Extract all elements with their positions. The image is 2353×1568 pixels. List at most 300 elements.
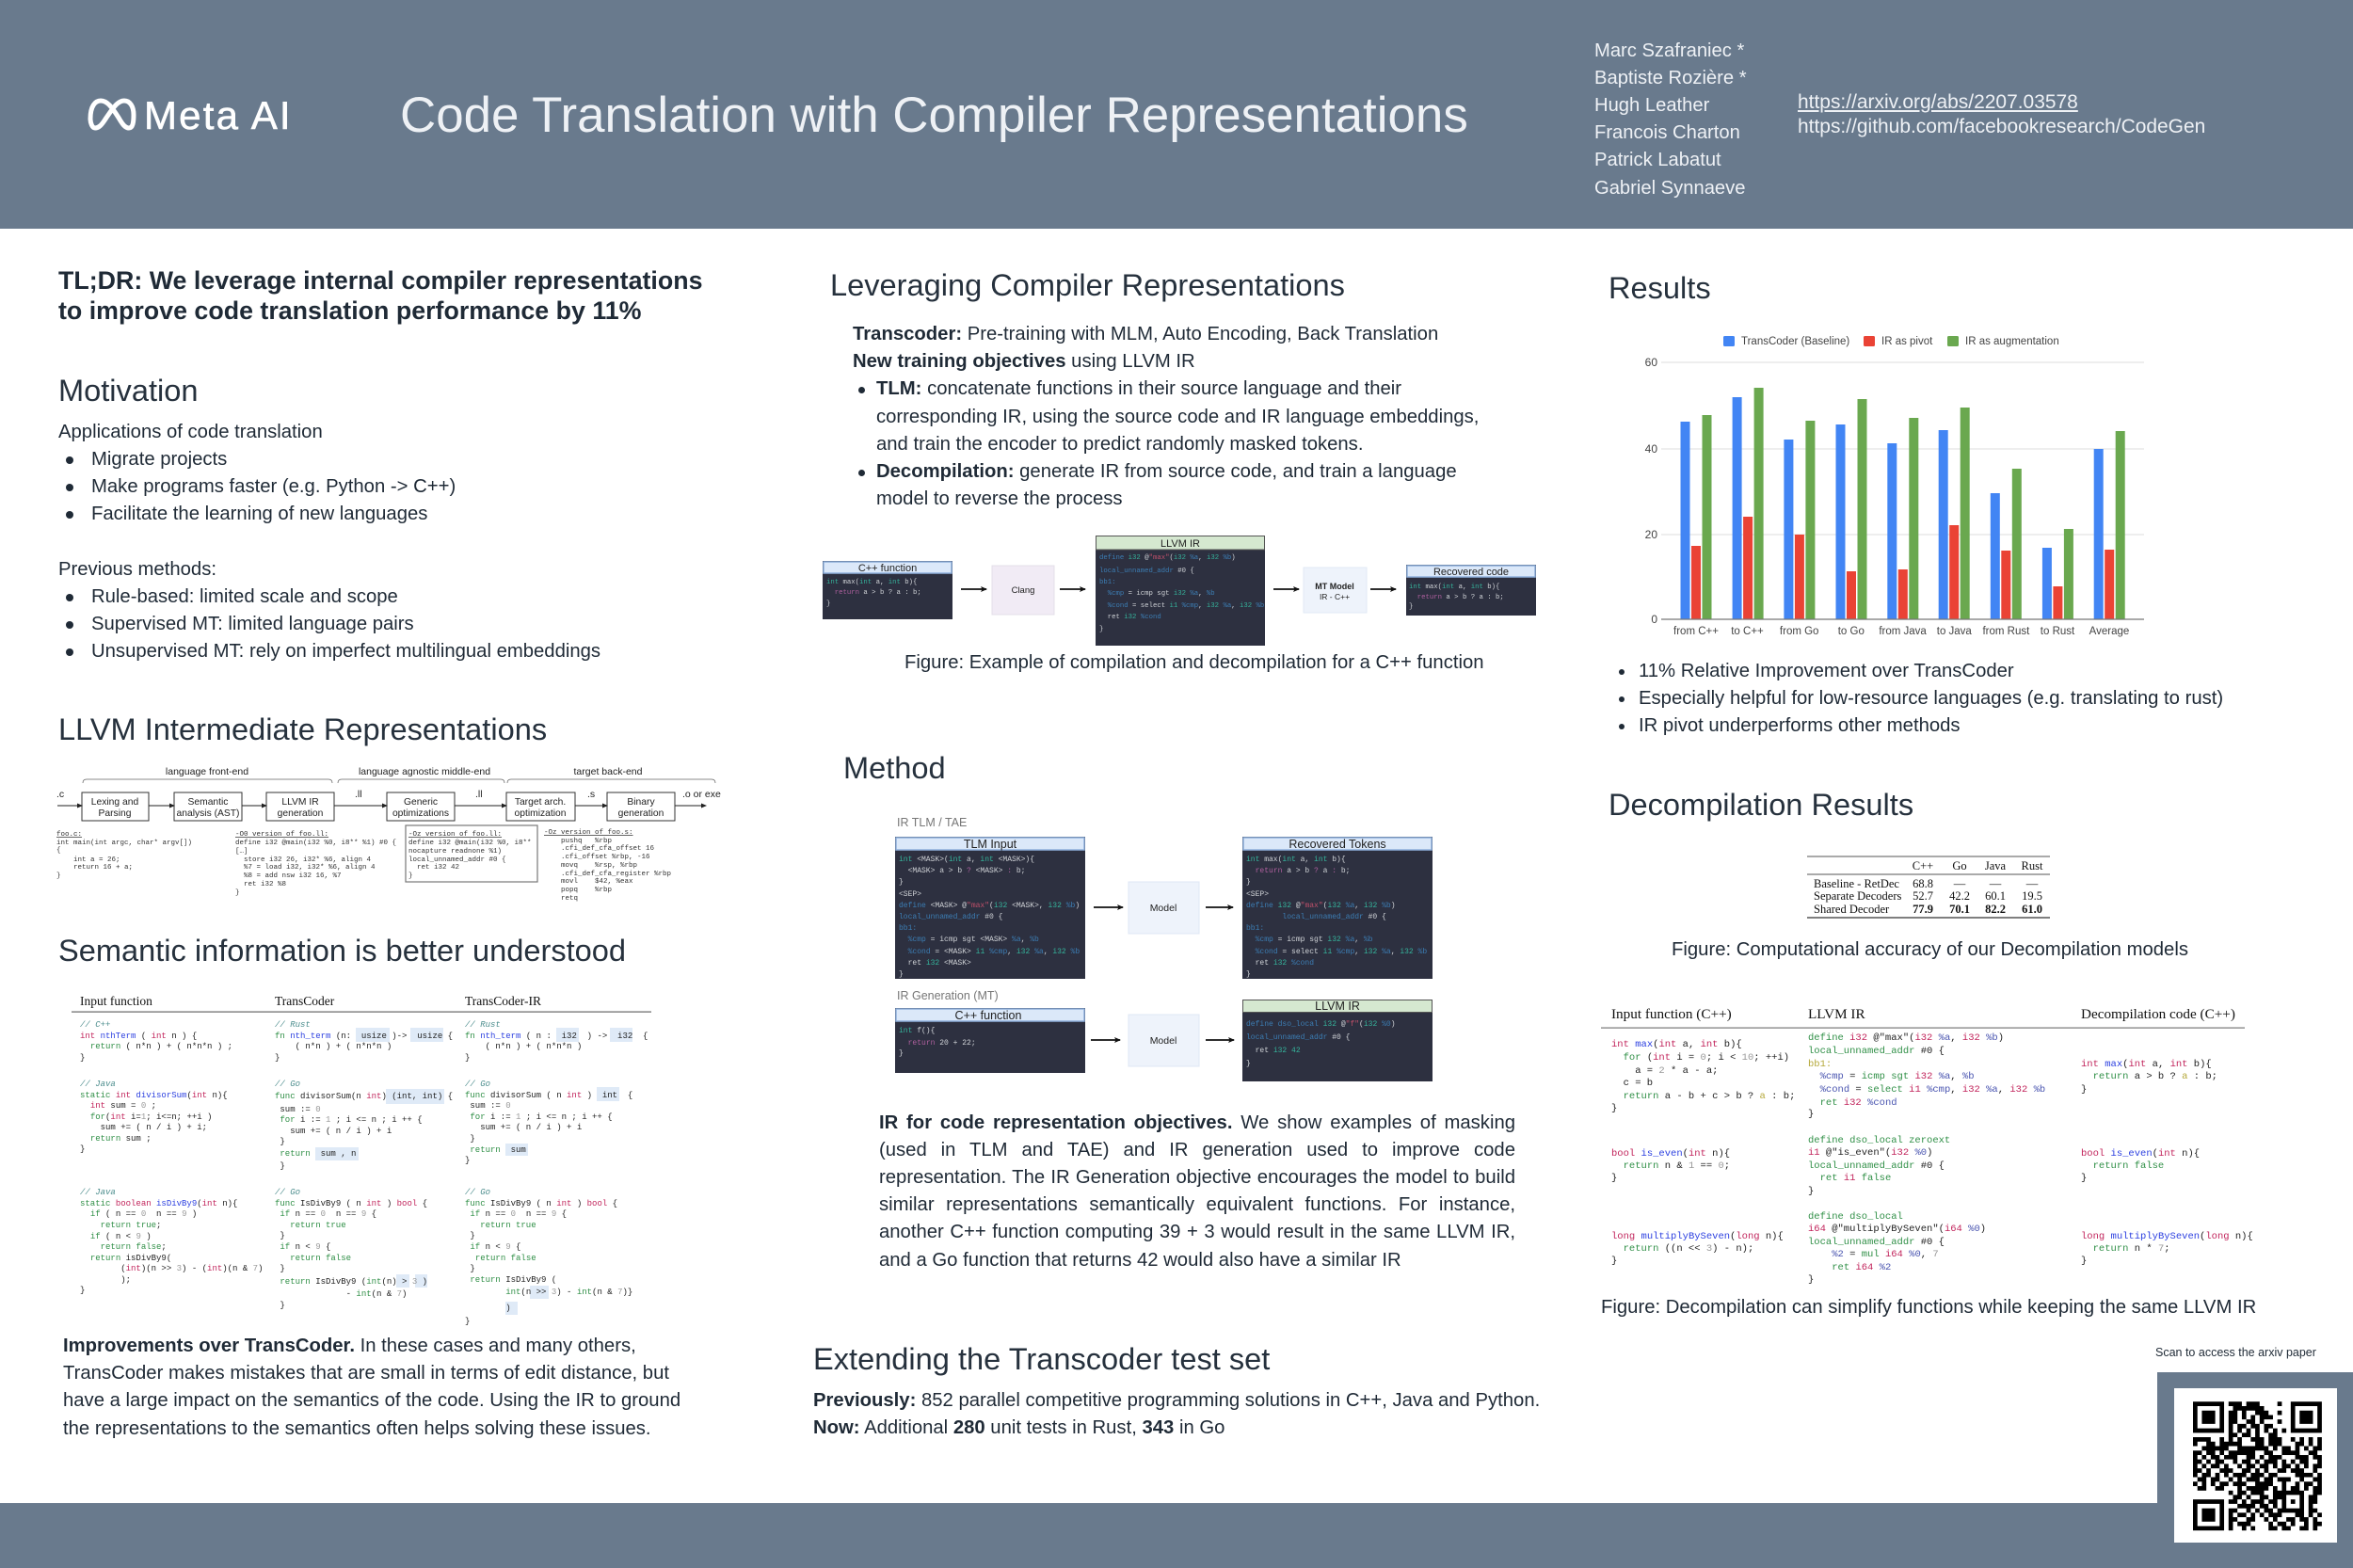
figure: translation examples table: // Go xyxy=(465,1080,490,1089)
table: decompilation accuracy: 42.2 xyxy=(1949,889,1970,903)
card: LLVM IR: bb1: xyxy=(1099,579,1116,586)
authors: Gabriel Synnaeve xyxy=(1594,178,1745,199)
table: decompilation accuracy: Separate Decoders xyxy=(1814,889,1901,903)
card: Recovered Tokens: bb1: xyxy=(1246,924,1264,933)
card: C++ function: C++ function xyxy=(858,563,917,574)
bar chart: translation results: from Go xyxy=(1780,626,1818,637)
figure: decompilation examples table: bool is_even(int n){ xyxy=(1611,1148,1730,1160)
card: C++ function: } xyxy=(826,600,830,608)
diagram: LLVM pipeline: int a = 26; xyxy=(56,856,120,864)
figure: translation examples table: } xyxy=(465,1156,470,1165)
diagram: LLVM pipeline: } xyxy=(408,872,413,880)
diagram: LLVM pipeline: optimization xyxy=(515,808,567,819)
diagram: LLVM pipeline: .ll xyxy=(355,789,362,800)
figure: translation examples table: ) xyxy=(465,1304,511,1313)
diagram: LLVM pipeline: .cfi_def_cfa_offset 16 xyxy=(544,845,655,853)
figure: decompilation examples table: %cmp = icmp sgt i32 %a, %b xyxy=(1808,1071,1975,1082)
figure: translation examples table: // Go xyxy=(275,1188,300,1197)
card: LLVM IR output xyxy=(1242,1000,1433,1081)
box: Clang: Clang xyxy=(1012,585,1034,596)
figure: decompilation examples table: return false xyxy=(2081,1160,2164,1172)
bar chart: translation results: 40 xyxy=(1645,442,1657,456)
figure: decompilation examples table: %cond = select i1 %cmp, i32 %a, i32 %b xyxy=(1808,1084,2045,1096)
figure: decompilation examples table: return a - b + c > b ? a : b; xyxy=(1611,1091,1795,1102)
TLDR: to improve code translation performance by 11% xyxy=(58,296,641,325)
header band xyxy=(0,0,2353,229)
caption: compilation figure: Figure: Example of compilation and decompilation for a C++ function xyxy=(904,651,1484,672)
figure: translation examples table: func divisorSum(n int) (int, int) { xyxy=(275,1092,453,1101)
card: LLVM IR: LLVM IR xyxy=(1160,538,1200,550)
caption: decompilation figure: Figure: Decompilation can simplify functions while keeping the same LLVM IR xyxy=(1601,1297,2256,1318)
figure: translation examples table: // Go xyxy=(465,1188,490,1197)
table: decompilation accuracy: 77.9 xyxy=(1913,903,1933,916)
figure: decompilation examples table: Decompilation code (C++) xyxy=(2081,1006,2235,1022)
card: Recovered Tokens: %cmp = icmp sgt i32 %a, %b xyxy=(1246,936,1373,944)
box: Model: Model xyxy=(1150,903,1176,914)
table: decompilation accuracy: 70.1 xyxy=(1949,903,1970,916)
method paragraph: similar representations semantically equivalent functions. For instance, xyxy=(879,1194,1515,1215)
figure: translation examples table: sum += ( n / i ) + i xyxy=(275,1127,392,1136)
card: Recovered Tokens: Recovered Tokens xyxy=(1289,838,1386,851)
bar chart: translation results: 20 xyxy=(1645,528,1657,541)
table: decompilation accuracy: 52.7 xyxy=(1913,889,1933,903)
figure: translation examples table: // Go xyxy=(275,1080,300,1089)
diagram: LLVM pipeline: %8 = add nsw i32 16, %7 xyxy=(235,872,342,880)
figure: translation examples table: ( n*n ) + ( n*n*n ) xyxy=(275,1042,392,1051)
diagram: LLVM pipeline: -O0 version of foo.ll: xyxy=(235,831,328,839)
leveraging text: and train the encoder to predict randomly masked tokens. xyxy=(876,434,1363,455)
figure: decompilation examples table: ret i32 %cond xyxy=(1808,1097,1897,1109)
QR code xyxy=(2174,1388,2337,1543)
card: LLVM IR output: LLVM IR xyxy=(1315,1000,1360,1013)
results bullets xyxy=(1619,661,2223,736)
leveraging text: Transcoder: Pre-training with MLM, Auto Encoding, Back Translation xyxy=(853,324,1438,344)
diagram: LLVM pipeline: Lexing and xyxy=(91,797,138,808)
bar chart: translation results: from C++ xyxy=(1673,626,1719,637)
diagram: LLVM pipeline: local_unnamed_addr #0 { xyxy=(408,856,506,864)
figure: decompilation examples table: Input function (C++) xyxy=(1611,1006,1732,1022)
diagram: LLVM pipeline: LLVM IR xyxy=(281,797,319,808)
results bullets: IR pivot underperforms other methods xyxy=(1639,715,1961,736)
figure: translation examples table: func divisorSum ( n int ) int { xyxy=(465,1091,632,1100)
card: Recovered Tokens: } xyxy=(1246,970,1251,979)
card: LLVM IR: } xyxy=(1099,626,1103,633)
authors: Patrick Labatut xyxy=(1594,150,1721,170)
figure: decompilation examples table: define i32 @"max"(i32 %a, i32 %b) xyxy=(1808,1032,2004,1044)
diagram: LLVM pipeline: generation xyxy=(278,808,324,819)
table: decompilation accuracy: Go xyxy=(1952,859,1967,872)
TLDR xyxy=(58,266,702,325)
figure: translation examples table: return sum ; xyxy=(80,1134,152,1144)
figure: translation examples table: sum := 0 xyxy=(275,1105,321,1114)
figure: decompilation examples table: return n & 1 == 0; xyxy=(1611,1160,1730,1172)
legend: TransCoder (Baseline) xyxy=(1741,336,1849,347)
card: LLVM IR: %cmp = icmp sgt i32 %a, %b xyxy=(1099,590,1215,598)
box: Model second: Model xyxy=(1150,1035,1176,1047)
leveraging text: TLM: concatenate functions in their source language and their xyxy=(876,378,1401,399)
figure: translation examples table: if ( n == 0 n == 9 ) xyxy=(80,1209,197,1219)
diagram: LLVM pipeline: Semantic xyxy=(188,797,228,808)
figure: translation examples table: for(int i=1; i<=n; ++i ) xyxy=(80,1112,212,1122)
figure: decompilation examples table: } xyxy=(1808,1109,1814,1120)
figure: translation examples table: if ( n < 9 ) xyxy=(80,1232,152,1241)
card: Recovered Tokens: local_unnamed_addr #0 { xyxy=(1246,913,1386,921)
figure: translation examples table: TransCoder-IR xyxy=(465,994,541,1008)
diagram: LLVM pipeline: store i32 26, i32* %6, align 4 xyxy=(235,856,372,864)
QR caption: Scan to access the arxiv paper xyxy=(2155,1346,2316,1359)
figure: decompilation examples table: local_unnamed_addr #0 { xyxy=(1808,1160,1945,1172)
figure: decompilation examples table: ret i1 false xyxy=(1808,1173,1891,1184)
table: decompilation accuracy: 82.2 xyxy=(1985,903,2006,916)
table: decompilation accuracy: Java xyxy=(1985,859,2007,872)
diagram: LLVM pipeline: Parsing xyxy=(99,808,132,819)
title: Code Translation with Compiler Representations xyxy=(400,87,1468,143)
card: C++ function xyxy=(823,561,952,619)
figure: translation examples table: if n < 9 { xyxy=(275,1242,330,1252)
card: LLVM IR output: ret i32 42 xyxy=(1246,1047,1301,1055)
card: Recovered code: } xyxy=(1409,603,1413,611)
extending text: Previously: 852 parallel competitive programming solutions in C++, Java and Python. xyxy=(813,1389,1540,1410)
card: TLM Input: int <MASK>(int a, int <MASK>){ xyxy=(899,856,1034,864)
bar chart: translation results: to Go xyxy=(1838,626,1865,637)
card: C++ function input: C++ function xyxy=(955,1009,1021,1022)
bar chart: translation results xyxy=(1645,336,2144,637)
diagram: LLVM pipeline: int main(int argc, char* argv[]) xyxy=(56,840,192,847)
figure: translation examples table: if n < 9 { xyxy=(465,1242,520,1252)
figure: translation examples table: int nthTerm ( int n ) { xyxy=(80,1032,197,1041)
method paragraph: (used in TLM and TAE) and IR generation used to improve code xyxy=(879,1140,1515,1160)
diagram: LLVM pipeline: movl $42, %eax xyxy=(544,878,633,886)
figure: translation examples table: fn nth_term (n: usize )-> usize { xyxy=(275,1032,453,1041)
table: decompilation accuracy: 60.1 xyxy=(1985,889,2006,903)
diagram: LLVM pipeline: -Oz version of foo.ll: xyxy=(408,831,502,839)
links: https://github.com/facebookresearch/CodeGen xyxy=(1798,115,2205,137)
improvements text: have a large impact on the semantics of the code. Using the IR to ground xyxy=(63,1390,680,1411)
bar chart: translation results: to C++ xyxy=(1731,626,1764,637)
diagram: LLVM pipeline: .s xyxy=(587,789,595,800)
figure: translation examples table: } xyxy=(275,1053,280,1063)
figure: decompilation examples table: local_unnamed_addr #0 { xyxy=(1808,1046,1945,1057)
figure: translation examples table: if n == 0 n == 9 { xyxy=(275,1209,376,1219)
figure: decompilation examples table: } xyxy=(2081,1256,2087,1267)
figure: decompilation examples table: long multiplyBySeven(long n){ xyxy=(1611,1231,1784,1242)
diagram: IR objectives: IR TLM / TAE xyxy=(897,816,967,829)
improvements text: Improvements over TransCoder. In these cases and many others, xyxy=(63,1336,636,1356)
figure: decompilation examples table: i64 @"multiplyBySeven"(i64 %0) xyxy=(1808,1224,1986,1235)
footer band xyxy=(0,1503,2353,1568)
diagram: LLVM pipeline: define i32 @main(i32 %0, i8** xyxy=(408,840,532,847)
figure: decompilation examples table: } xyxy=(1611,1173,1617,1184)
bar chart: translation results: to Java xyxy=(1937,626,1972,637)
bar chart: translation results: from Rust xyxy=(1982,626,2030,637)
figure: decompilation examples table: c = b xyxy=(1611,1078,1653,1089)
diagram: LLVM pipeline: -Oz version of foo.s: xyxy=(544,829,633,837)
figure: translation examples table: } xyxy=(465,1053,470,1063)
figure: decompilation examples table: ret i64 %2 xyxy=(1808,1262,1891,1273)
leveraging text: New training objectives using LLVM IR xyxy=(853,351,1195,372)
figure: translation examples table: // Rust xyxy=(465,1020,501,1030)
figure: translation examples table: return true; xyxy=(80,1221,161,1230)
method paragraph xyxy=(879,1112,1515,1271)
figure: decompilation examples table: } xyxy=(2081,1084,2087,1096)
diagram: LLVM pipeline: language agnostic middle-end xyxy=(359,766,490,777)
figure: translation examples table: } xyxy=(465,1264,475,1273)
figure: translation examples table: } xyxy=(275,1301,285,1310)
box: Model xyxy=(1128,882,1199,934)
TLDR: TL;DR: We leverage internal compiler representations xyxy=(58,266,702,295)
figure: translation examples table: sum += ( n / i ) + i xyxy=(465,1123,582,1132)
card: TLM Input: %cmp = icmp sgt <MASK> %a, %b xyxy=(899,936,1039,944)
authors xyxy=(1594,40,1747,199)
figure: translation examples table: } xyxy=(465,1231,475,1240)
card: LLVM IR: local_unnamed_addr #0 { xyxy=(1099,568,1194,575)
figure: translation examples table: return false xyxy=(465,1254,536,1263)
figure: translation examples table: // Rust xyxy=(275,1020,311,1030)
diagram: LLVM pipeline: } xyxy=(56,872,61,880)
figure: translation examples table: } xyxy=(275,1231,285,1240)
figure: translation examples table: if n == 0 n == 9 { xyxy=(465,1209,567,1219)
figure: decompilation examples table: bb1: xyxy=(1808,1059,1832,1070)
leveraging text: model to reverse the process xyxy=(876,488,1123,509)
heading: Motivation: Motivation xyxy=(58,373,198,408)
card: LLVM IR: %cond = select i1 %cmp, i32 %a, i32 %b xyxy=(1099,602,1264,610)
table: decompilation accuracy: 19.5 xyxy=(2022,889,2042,903)
figure: translation examples table: } xyxy=(275,1264,285,1273)
card: Recovered code: return a > b ? a : b; xyxy=(1409,594,1504,601)
figure: decompilation examples table: long multiplyBySeven(long n){ xyxy=(2081,1231,2253,1242)
figure: decompilation examples table: int max(int a, int b){ xyxy=(1611,1039,1742,1050)
card: C++ function input: int f(){ xyxy=(899,1027,936,1035)
logo: Meta AI: Meta AI xyxy=(144,93,293,137)
diagram: LLVM pipeline: %7 = load i32, i32* %6, align 4 xyxy=(235,864,376,872)
diagram: LLVM pipeline: .cfi_offset %rbp, -16 xyxy=(544,854,650,861)
figure: decompilation examples table: i1 @"is_even"(i32 %0) xyxy=(1808,1147,1932,1159)
diagram: LLVM pipeline: optimizations xyxy=(392,808,449,819)
card: TLM Input: bb1: xyxy=(899,924,917,933)
figure: translation examples table: return ( n*n ) + ( n*n*n ) ; xyxy=(80,1042,232,1051)
box: Clang xyxy=(992,566,1054,615)
diagram: LLVM pipeline: ret i32 %8 xyxy=(235,881,286,888)
figure: translation examples table: Input function xyxy=(80,994,152,1008)
motivation text: Supervised MT: limited language pairs xyxy=(91,614,414,634)
figure: translation examples table: static boolean isDivBy9(int n){ xyxy=(80,1199,237,1208)
diagram: LLVM pipeline: […] xyxy=(235,848,248,856)
figure: decompilation examples table: a = 2 * a - a; xyxy=(1611,1065,1718,1077)
figure: translation examples table: } xyxy=(80,1144,85,1154)
table: decompilation accuracy: — xyxy=(1989,877,2002,890)
card: TLM Input: <MASK> a > b ? <MASK> : b; xyxy=(899,867,1025,875)
bar chart: translation results: 0 xyxy=(1651,613,1657,626)
figure: translation examples table: return true xyxy=(275,1221,346,1230)
authors: Baptiste Rozière * xyxy=(1594,68,1747,88)
card: Recovered Tokens: <SEP> xyxy=(1246,890,1269,899)
figure: translation examples table: func IsDivBy9 ( n int ) bool { xyxy=(275,1199,427,1208)
card: TLM Input: <SEP> xyxy=(899,890,921,899)
diagram: IR objectives: IR Generation (MT) xyxy=(897,989,999,1002)
method paragraph: and a Go function that returns 42 would also have a similar IR xyxy=(879,1250,1401,1271)
card: LLVM IR: ret i32 %cond xyxy=(1099,614,1161,621)
card: TLM Input: TLM Input xyxy=(964,838,1017,851)
bar chart: translation results: to Rust xyxy=(2041,626,2075,637)
diagram: LLVM pipeline: nocapture readnone %1) xyxy=(408,848,502,856)
motivation text: Rule-based: limited scale and scope xyxy=(91,586,398,607)
bar chart: translation results: from Java xyxy=(1879,626,1927,637)
figure: decompilation examples table: } xyxy=(2081,1173,2087,1184)
table: decompilation accuracy: — xyxy=(2025,877,2039,890)
diagram: LLVM pipeline: foo.c: xyxy=(56,831,82,839)
figure: decompilation examples table: for (int i = 0; i < 10; ++i) xyxy=(1611,1052,1789,1064)
caption: accuracy table: Figure: Computational accuracy of our Decompilation models xyxy=(1672,939,2188,960)
diagram: LLVM pipeline: { xyxy=(56,847,61,855)
legend: IR as augmentation xyxy=(1965,336,2059,347)
figure: translation examples table: return false; xyxy=(80,1242,167,1252)
card: Recovered Tokens: define i32 @"max"(i32 %a, i32 %b) xyxy=(1246,902,1396,910)
figure: translation examples table: return IsDivBy9 ( xyxy=(465,1275,556,1285)
heading: Method: Method xyxy=(843,750,946,785)
figure: translation examples table: ); xyxy=(80,1275,131,1285)
figure: decompilation examples table: define dso_local zeroext xyxy=(1808,1135,1950,1146)
box: Model second xyxy=(1128,1015,1199,1066)
figure: translation examples table: return false xyxy=(275,1254,351,1263)
figure: translation examples table: TransCoder xyxy=(275,994,335,1008)
figure: translation examples table: return sum xyxy=(465,1145,526,1155)
diagram: compilation and decompilation flow xyxy=(823,536,1536,646)
method paragraph: representation. The IR Generation objective encourages the model to build xyxy=(879,1167,1515,1188)
box: MT Model: MT Model xyxy=(1315,582,1354,591)
card: TLM Input xyxy=(895,837,1085,979)
figure: translation examples table: } xyxy=(275,1137,285,1146)
method paragraph: another C++ function computing 39 + 3 would result in the same LLVM IR, xyxy=(879,1222,1515,1242)
figure: translation examples table: } xyxy=(465,1317,470,1326)
improvements text xyxy=(63,1336,680,1439)
figure: translation examples table: // Java xyxy=(80,1080,116,1089)
diagram: LLVM pipeline: retq xyxy=(544,895,578,903)
figure: translation examples table: static int divisorSum(int n){ xyxy=(80,1091,228,1100)
leveraging text: Decompilation: generate IR from source code, and train a language xyxy=(876,461,1457,482)
figure: decompilation examples table: int max(int a, int b){ xyxy=(2081,1059,2212,1070)
table: decompilation accuracy: Baseline - RetDec xyxy=(1814,877,1899,890)
table: decompilation accuracy: Rust xyxy=(2022,859,2043,872)
motivation text: Unsupervised MT: rely on imperfect multilingual embeddings xyxy=(91,641,600,662)
card: TLM Input: define <MASK> @"max"(i32 <MASK>, i32 %b) xyxy=(899,902,1080,910)
table: decompilation accuracy: — xyxy=(1953,877,1966,890)
card: Recovered Tokens: ret i32 %cond xyxy=(1246,959,1314,968)
heading: Decompilation Results: Decompilation Results xyxy=(1609,787,1913,822)
table: decompilation accuracy: C++ xyxy=(1913,859,1933,872)
figure: translation examples table: for i := 1 ; i <= n ; i ++ { xyxy=(275,1115,423,1125)
table: decompilation accuracy: 68.8 xyxy=(1913,877,1933,890)
method paragraph: IR for code representation objectives. We show examples of masking xyxy=(879,1112,1515,1133)
diagram: LLVM pipeline: ret i32 42 xyxy=(408,864,459,872)
figure: translation examples table xyxy=(72,994,651,1326)
diagram: LLVM pipeline: movq %rsp, %rbp xyxy=(544,862,637,870)
diagram: LLVM pipeline: analysis (AST) xyxy=(177,808,239,819)
card: TLM Input: } xyxy=(899,878,904,887)
figure: translation examples table: return IsDivBy9 (int(n) > 3 ) xyxy=(275,1277,427,1287)
card: TLM Input: local_unnamed_addr #0 { xyxy=(899,913,1003,921)
figure: decompilation examples table: } xyxy=(1611,1256,1617,1267)
figure: decompilation examples table: return n * 7; xyxy=(2081,1243,2170,1255)
diagram: LLVM pipeline: popq %rbp xyxy=(544,887,612,894)
authors: Francois Charton xyxy=(1594,122,1740,143)
heading: Semantic: Semantic information is better understood xyxy=(58,933,626,968)
card: LLVM IR output: } xyxy=(1246,1060,1251,1068)
diagram: LLVM pipeline: Target arch. xyxy=(515,797,566,808)
card: LLVM IR: define i32 @"max"(i32 %a, i32 %b) xyxy=(1099,554,1236,562)
card: TLM Input: } xyxy=(899,970,904,979)
figure: decompilation examples table: } xyxy=(1808,1274,1814,1286)
motivation text: Previous methods: xyxy=(58,559,216,580)
diagram: LLVM pipeline: .ll xyxy=(475,789,483,800)
figure: decompilation examples table: return a > b ? a : b; xyxy=(2081,1071,2217,1082)
figure: translation examples table: int sum = 0 ; xyxy=(80,1101,156,1111)
leveraging text xyxy=(853,324,1479,509)
card: C++ function: int max(int a, int b){ xyxy=(826,579,917,586)
card: C++ function input: } xyxy=(899,1049,904,1058)
figure: translation examples table: sum := 0 xyxy=(465,1101,511,1111)
figure: translation examples table: sum += ( n / i ) + i; xyxy=(80,1123,207,1132)
card: Recovered code: Recovered code xyxy=(1433,567,1509,578)
highlights xyxy=(315,1028,632,1315)
diagram: LLVM pipeline: language front-end xyxy=(166,766,248,777)
diagram: LLVM pipeline: generation xyxy=(618,808,664,819)
figure: translation examples table: // C++ xyxy=(80,1020,110,1030)
heading: Results: Results xyxy=(1609,270,1711,305)
figure: translation examples table: int(n >> 3) - int(n & 7)} xyxy=(465,1288,632,1297)
motivation text xyxy=(58,422,600,662)
improvements text: TransCoder makes mistakes that are small in terms of edit distance, but xyxy=(63,1363,669,1384)
figure: translation examples table: } xyxy=(80,1053,85,1063)
heading: Leveraging: Leveraging Compiler Representations xyxy=(830,267,1345,302)
results bullets: 11% Relative Improvement over TransCoder xyxy=(1639,661,2014,681)
legend: IR as pivot xyxy=(1881,336,1933,347)
figure: translation examples table: } xyxy=(275,1161,285,1171)
figure: translation examples table: } xyxy=(80,1286,85,1295)
figure: decompilation examples table: LLVM IR xyxy=(1808,1006,1865,1022)
card: Recovered Tokens xyxy=(1242,837,1433,979)
figure: decompilation examples table: } xyxy=(1808,1186,1814,1197)
QR backing panel xyxy=(2157,1372,2353,1504)
figure: translation examples table: } xyxy=(465,1134,475,1144)
heading: LLVM: LLVM Intermediate Representations xyxy=(58,712,547,746)
card: Recovered Tokens: return a > b ? a : b; xyxy=(1246,867,1350,875)
bar chart: translation results: 60 xyxy=(1645,356,1657,369)
diagram: LLVM pipeline: pushq %rbp xyxy=(544,838,612,845)
figure: decompilation examples table: %2 = mul i64 %0, 7 xyxy=(1808,1249,1939,1260)
card: LLVM IR output: local_unnamed_addr #0 { xyxy=(1246,1033,1351,1042)
figure: translation examples table: return true xyxy=(465,1221,536,1230)
improvements text: the representations to the semantics often helps solving these issues. xyxy=(63,1418,651,1439)
figure: translation examples table: (int)(n >> 3) - (int)(n & 7) xyxy=(80,1264,263,1273)
bar chart: translation results: Average xyxy=(2089,626,2129,637)
card: Recovered code xyxy=(1406,565,1536,616)
diagram: LLVM pipeline: target back-end xyxy=(574,766,643,777)
results bullets: Especially helpful for low-resource languages (e.g. translating to rust) xyxy=(1639,688,2223,709)
card: TLM Input: %cond = <MASK> i1 %cmp, i32 %a, i32 %b xyxy=(899,948,1080,956)
card: Recovered Tokens: int max(int a, int b){ xyxy=(1246,856,1346,864)
extending text: Now: Additional 280 unit tests in Rust, 343 in Go xyxy=(813,1417,1225,1438)
figure: translation examples table: for i := 1 ; i <= n ; i ++ { xyxy=(465,1112,613,1122)
extending text xyxy=(813,1389,1540,1438)
authors: Hugh Leather xyxy=(1594,95,1709,116)
legend xyxy=(1723,336,2059,347)
card: C++ function input: return 20 + 22; xyxy=(899,1039,976,1048)
diagram: LLVM pipeline: Binary xyxy=(627,797,655,808)
diagram: LLVM pipeline: .cfi_def_cfa_register %rbp xyxy=(544,871,671,878)
card: C++ function input xyxy=(895,1008,1085,1073)
figure: decompilation examples table: local_unnamed_addr #0 { xyxy=(1808,1237,1945,1248)
figure: translation examples table: return isDivBy9( xyxy=(80,1254,171,1263)
